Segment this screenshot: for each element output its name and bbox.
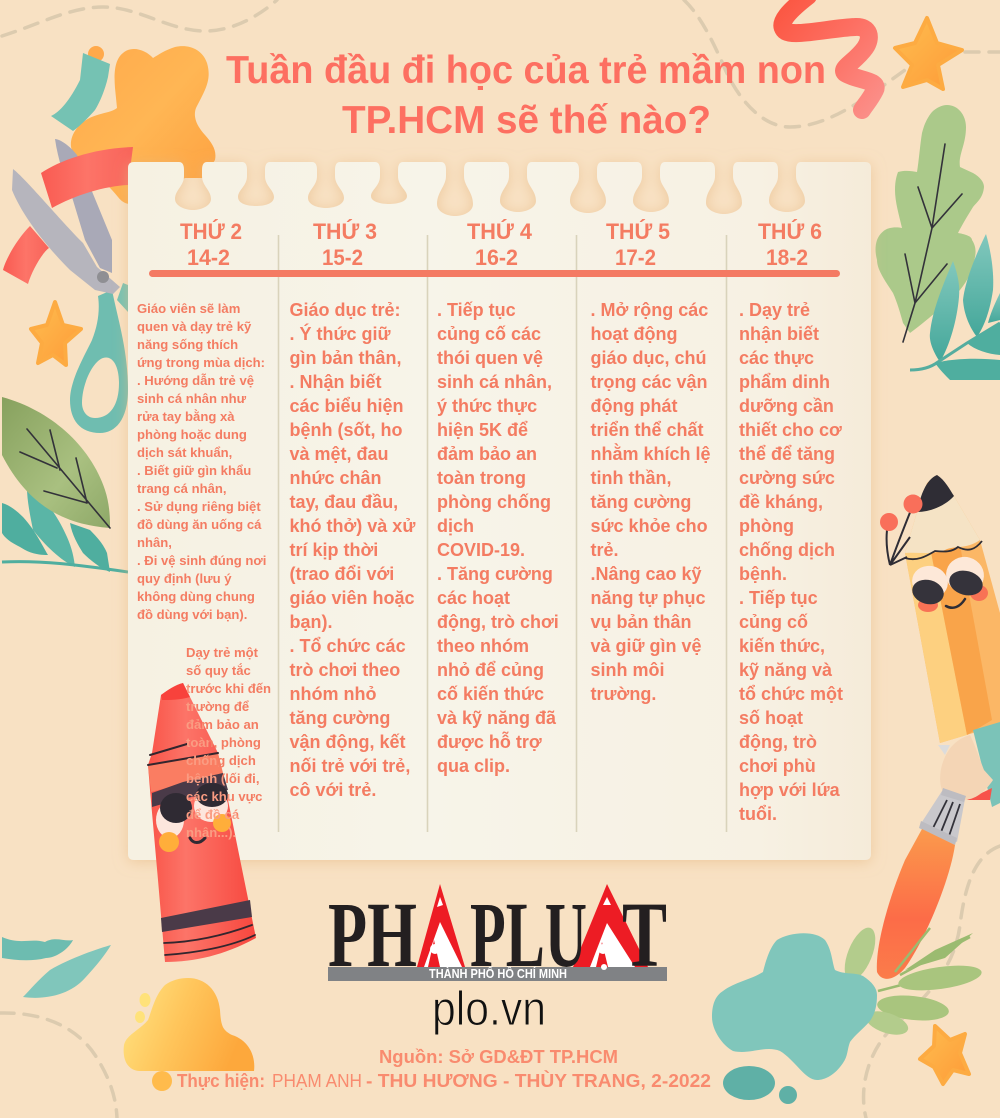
column 1: Thứ 2 text: . Hướng dẫn trẻ vệ (137, 373, 254, 388)
column 5: Thứ 6 text: tuổi. (739, 804, 777, 824)
column 3: Thứ 4 text: qua clip. (437, 756, 510, 776)
column 2: Thứ 3 text: khó thở) và xử (290, 516, 416, 536)
column 1: Thứ 2 text: sinh cá nhân như (137, 391, 247, 406)
column 1: Thứ 2 text: . Sử dụng riêng biệt (137, 499, 261, 514)
column 4: Thứ 5 text: hoạt động (590, 324, 677, 344)
column 4: Thứ 5 text: nhằm khích lệ (590, 443, 711, 464)
illustration: star top right (895, 18, 962, 89)
column 2: Thứ 3 text: tay, đau đầu, (290, 492, 398, 512)
column 5: Thứ 6 text: tổ chức một (739, 684, 843, 704)
column 1: Thứ 2 text: rửa tay bằng xà (137, 409, 235, 424)
column 2: Thứ 3 text: các biểu hiện (290, 396, 404, 416)
column headers: THỨ 2 (180, 219, 242, 244)
column 4: Thứ 5 text (590, 300, 711, 704)
column 2: Thứ 3 text: cô với trẻ. (290, 780, 376, 800)
column 1: Thứ 2 text (137, 301, 271, 840)
column 3: Thứ 4 text: và kỹ năng đã (437, 708, 557, 728)
column 2: Thứ 3 text: gìn bản thân, (290, 348, 402, 368)
column 2: Thứ 3 text: vận động, kết (290, 732, 406, 752)
illustration: teal blob and drops (712, 933, 877, 1104)
column 4: Thứ 5 text: tăng cường (590, 492, 691, 512)
column 5: Thứ 6 text: dưỡng cần (739, 396, 834, 416)
column 1: Thứ 2 text: năng sống thích (137, 337, 238, 352)
column 2: Thứ 3 text: nhóm nhỏ (290, 684, 376, 704)
column headers: THỨ 5 (606, 219, 670, 244)
column 4: Thứ 5 text: . Mở rộng các (590, 300, 708, 320)
column 4: Thứ 5 text: triển thể chất (590, 420, 704, 440)
column 3: Thứ 4 text: sinh cá nhân, (437, 372, 552, 392)
column 5: Thứ 6 text: đề kháng, (739, 492, 823, 512)
illustration: small star left (31, 302, 81, 365)
column headers: THỨ 4 (467, 219, 533, 244)
column 3: Thứ 4 text: hiện 5K để (437, 420, 528, 440)
column 1: Thứ 2 text: số quy tắc (186, 663, 251, 678)
column 3: Thứ 4 text: cố kiến thức (437, 684, 544, 704)
column 5: Thứ 6 text: thiết cho cơ (739, 420, 842, 440)
column 1: Thứ 2 text: chống dịch (186, 753, 256, 768)
column 4: Thứ 5 text: .Nâng cao kỹ (590, 564, 702, 584)
column 2: Thứ 3 text: nhức chân (290, 468, 382, 488)
column 4: Thứ 5 text: vụ bản thân (590, 612, 692, 632)
title (226, 49, 826, 142)
column headers: 15-2 (322, 245, 363, 270)
column headers: THỨ 6 (758, 219, 822, 244)
column 2: Thứ 3 text: bạn). (290, 612, 332, 632)
column 1: Thứ 2 text: đồ dùng với bạn). (137, 607, 247, 622)
illustration: teal leaves bottom left (2, 937, 111, 998)
column 1: Thứ 2 text: ứng trong mùa dịch: (137, 355, 265, 370)
illustration: teal ribbon (51, 53, 110, 131)
column 5: Thứ 6 text: phẩm dinh (739, 372, 830, 392)
column headers (180, 219, 822, 270)
column 5: Thứ 6 text: củng cố (739, 612, 808, 632)
column 2: Thứ 3 text: Giáo dục trẻ: (290, 300, 401, 320)
column 3: Thứ 4 text (437, 300, 559, 776)
column headers: 18-2 (766, 245, 808, 270)
illustration: pencil holding paintbrush (877, 475, 1000, 979)
column 5: Thứ 6 text: kỹ năng và (739, 660, 833, 680)
column 1: Thứ 2 text: . Biết giữ gìn khẩu (137, 463, 251, 478)
illustration: green sprig (838, 924, 983, 1039)
column 4: Thứ 5 text: động phát (590, 396, 677, 416)
column 1: Thứ 2 text: trang cá nhân, (137, 481, 226, 496)
logo: Pháp Luật: PH (328, 884, 417, 987)
column 1: Thứ 2 text: các khu vực (186, 789, 262, 804)
column 2: Thứ 3 text: bệnh (sốt, ho (290, 420, 402, 440)
column 2: Thứ 3 text: trò chơi theo (290, 660, 400, 680)
panel: torn-top schedule card (128, 162, 871, 860)
column 3: Thứ 4 text: phòng chống (437, 492, 551, 512)
illustration: leaves left (2, 397, 128, 572)
column 3: Thứ 4 text: COVID-19. (437, 540, 525, 560)
website label: plo.vn (432, 983, 546, 1036)
illustration: green and teal leaves right (876, 105, 1000, 380)
column 5: Thứ 6 text: cường sức (739, 468, 835, 488)
column 5: Thứ 6 text: số hoạt (739, 708, 803, 728)
column 2: Thứ 3 text: (trao đổi với (290, 564, 394, 584)
column headers: 17-2 (615, 245, 656, 270)
column 1: Thứ 2 text: Giáo viên sẽ làm (137, 301, 240, 316)
column 2: Thứ 3 text: giáo viên hoặc (290, 588, 415, 608)
column 1: Thứ 2 text: Dạy trẻ một (186, 645, 259, 660)
column 1: Thứ 2 text: nhân, (137, 535, 172, 550)
column 2: Thứ 3 text: nối trẻ với trẻ, (290, 756, 410, 776)
column 5: Thứ 6 text: phòng (739, 516, 794, 536)
column 3: Thứ 4 text: động, trò chơi (437, 612, 559, 632)
column 4: Thứ 5 text: và giữ gìn vệ (590, 636, 702, 656)
illustration: red ribbon (3, 147, 133, 284)
credits line (177, 1070, 711, 1091)
column 3: Thứ 4 text: các hoạt (437, 588, 510, 608)
column 5: Thứ 6 text: nhận biết (739, 324, 819, 344)
credits line: PHẠM ANH (272, 1071, 362, 1091)
illustration: scissor blade and pivot (12, 169, 120, 294)
column 1: Thứ 2 text: để đồ cá (186, 807, 240, 822)
column 3: Thứ 4 text: . Tăng cường (437, 564, 553, 584)
column 3: Thứ 4 text: thói quen vệ (437, 348, 543, 368)
column 1: Thứ 2 text: quen và dạy trẻ kỹ (137, 319, 252, 334)
column 5: Thứ 6 text: . Dạy trẻ (739, 300, 810, 320)
column 4: Thứ 5 text: sinh môi (590, 660, 665, 680)
column 2: Thứ 3 text: và mệt, đau (290, 444, 389, 464)
column 4: Thứ 5 text: trường. (590, 684, 656, 704)
column 3: Thứ 4 text: ý thức thực (437, 396, 537, 416)
illustration: star bottom right (920, 1026, 969, 1084)
column 1: Thứ 2 text: nhân...). (186, 825, 236, 840)
column 4: Thứ 5 text: giáo dục, chú (590, 348, 707, 368)
column 2: Thứ 3 text: . Nhận biết (290, 372, 382, 392)
column 2: Thứ 3 text: . Tổ chức các (290, 636, 406, 656)
column 1: Thứ 2 text: không dùng chung (137, 589, 255, 604)
illustration: yellow blob bottom (124, 978, 254, 1091)
column 5: Thứ 6 text: . Tiếp tục (739, 588, 818, 608)
column 3: Thứ 4 text: toàn trong (437, 468, 526, 488)
column 1: Thứ 2 text: toàn, phòng (186, 735, 261, 750)
credits line: - THU HƯƠNG - THÙY TRANG, 2-2022 (366, 1070, 711, 1091)
column 5: Thứ 6 text: bệnh. (739, 564, 787, 584)
column 1: Thứ 2 text: dịch sát khuẩn, (137, 445, 232, 460)
column 2: Thứ 3 text: trí kịp thời (290, 540, 378, 560)
illustration: scissors (55, 139, 128, 433)
column 2: Thứ 3 text: . Ý thức giữ (290, 323, 392, 344)
column 2: Thứ 3 text (290, 300, 416, 800)
table dividers and header rule (149, 235, 840, 832)
column 3: Thứ 4 text: nhỏ để củng (437, 660, 544, 680)
column 5: Thứ 6 text: động, trò (739, 732, 817, 752)
column 1: Thứ 2 text: trước khi đến (186, 681, 271, 696)
column 3: Thứ 4 text: được hỗ trợ (437, 731, 542, 752)
column 2: Thứ 3 text: tăng cường (290, 708, 390, 728)
column 4: Thứ 5 text: tinh thần, (590, 468, 671, 488)
logo: Pháp Luật (328, 884, 667, 987)
column headers: 14-2 (187, 245, 230, 270)
logo: Pháp Luật: T (622, 884, 667, 987)
column 1: Thứ 2 text: bệnh (lối đi, (186, 771, 259, 786)
title: TP.HCM sẽ thế nào? (342, 99, 711, 142)
column 1: Thứ 2 text: quy định (lưu ý (137, 571, 232, 586)
column headers: 16-2 (475, 245, 518, 270)
column 3: Thứ 4 text: . Tiếp tục (437, 300, 516, 320)
column 5: Thứ 6 text: chơi phù (739, 756, 816, 776)
column 4: Thứ 5 text: sức khỏe cho (590, 516, 708, 536)
column 5: Thứ 6 text (739, 300, 843, 824)
column 3: Thứ 4 text: củng cố các (437, 324, 541, 344)
column 3: Thứ 4 text: đảm bảo an (437, 444, 537, 464)
column 1: Thứ 2 text: đảm bảo an (186, 717, 259, 732)
column 4: Thứ 5 text: trẻ. (590, 540, 619, 560)
credits line: Thực hiện: (177, 1071, 265, 1091)
column 1: Thứ 2 text: phòng hoặc dung (137, 427, 247, 442)
source line: Nguồn: Sở GD&ĐT TP.HCM (379, 1047, 618, 1067)
logo: Pháp Luật: PLU (470, 884, 587, 987)
illustration: orange blob top left (71, 46, 215, 204)
column 1: Thứ 2 text: . Đi vệ sinh đúng nơi (137, 553, 266, 568)
column 4: Thứ 5 text: trọng các vận (590, 372, 708, 392)
column 3: Thứ 4 text: dịch (437, 516, 474, 536)
logo: Pháp Luật: THÀNH PHỐ HỒ CHÍ MINH (429, 966, 567, 981)
column 3: Thứ 4 text: theo nhóm (437, 636, 529, 656)
column 5: Thứ 6 text: hợp với lứa (739, 780, 841, 800)
column 5: Thứ 6 text: thể để tăng (739, 444, 835, 464)
column 5: Thứ 6 text: chống dịch (739, 540, 835, 560)
column 5: Thứ 6 text: kiến thức, (739, 636, 825, 656)
column 1: Thứ 2 text: trường để (186, 699, 249, 714)
column 5: Thứ 6 text: các thực (739, 348, 814, 368)
illustration: red squiggle (782, 0, 876, 110)
column 4: Thứ 5 text: năng tự phục (590, 588, 706, 608)
illustration: crayon character (148, 683, 256, 962)
title: Tuần đầu đi học của trẻ mầm non (226, 49, 826, 92)
column 1: Thứ 2 text: đồ dùng ăn uống cá (137, 517, 262, 532)
column headers: THỨ 3 (313, 219, 377, 244)
